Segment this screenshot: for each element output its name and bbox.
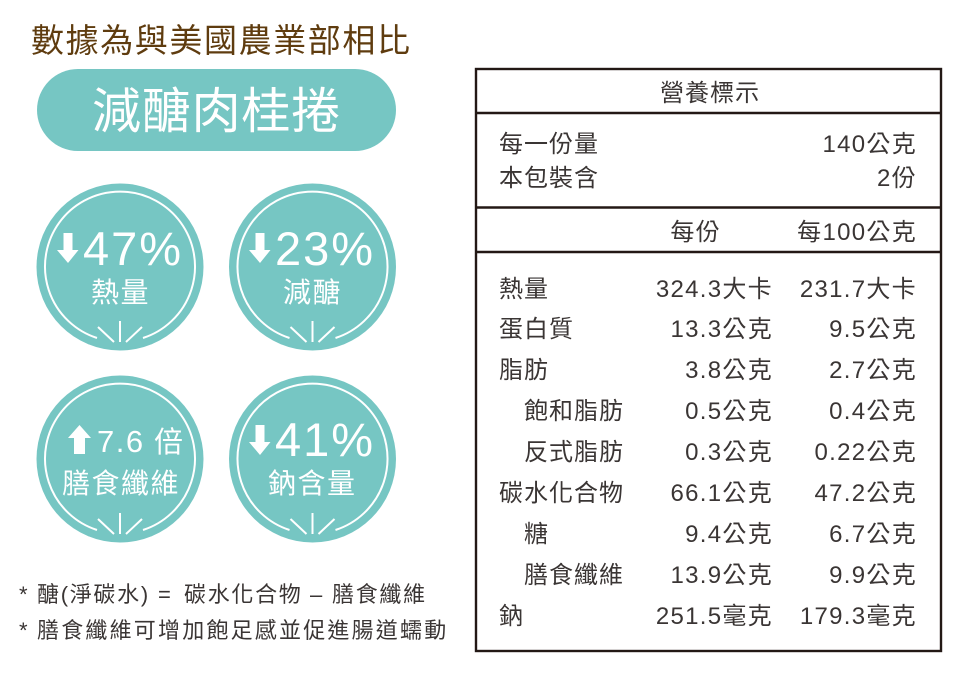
nutrient rows: 13.9公克	[670, 562, 773, 589]
serving info: 每一份量	[499, 131, 599, 158]
nutrient rows: 13.3公克	[670, 316, 773, 343]
nutrient rows: 蛋白質	[499, 316, 574, 343]
footnotes: =	[158, 582, 173, 607]
product name pill: 減醣肉桂捲	[92, 85, 341, 139]
nutrient rows: 9.4公克	[685, 521, 773, 548]
column headers: 每100公克	[797, 219, 917, 246]
serving info: 2份	[877, 165, 917, 192]
nutrient rows: 0.5公克	[685, 398, 773, 425]
footnotes: 膳食纖維	[332, 582, 427, 607]
badge: calories -47%: 47%	[83, 222, 183, 275]
product name pill	[37, 69, 396, 151]
nutrient rows: 324.3大卡	[656, 276, 773, 303]
footnotes: 膳食纖維可增加飽足感並促進腸道蠕動	[37, 618, 448, 643]
nutrient rows: 9.9公克	[829, 562, 917, 589]
nutrient rows: 179.3毫克	[800, 603, 917, 630]
badge: sodium -41%	[229, 376, 396, 542]
nutrient rows: 231.7大卡	[800, 276, 917, 303]
badge: dietary fiber 7.6x	[36, 376, 204, 542]
nutrient rows: 碳水化合物	[499, 480, 624, 507]
table title: 營養標示	[660, 80, 760, 107]
badge: calories -47%: 熱量	[91, 277, 150, 308]
footnotes: 醣(淨碳水)	[37, 582, 150, 607]
badge: calories -47%	[36, 184, 204, 350]
nutrient rows: 47.2公克	[814, 480, 917, 507]
nutrition facts table	[476, 69, 941, 651]
serving info: 140公克	[822, 131, 917, 158]
badge: dietary fiber 7.6x: 膳食纖維	[62, 468, 180, 499]
badge: dietary fiber 7.6x: 7.6	[97, 424, 145, 459]
nutrient rows: 飽和脂肪	[524, 398, 624, 425]
nutrient rows: 66.1公克	[670, 480, 773, 507]
footnotes: *	[19, 582, 29, 607]
badge: net carbs -23%	[229, 184, 396, 350]
serving info: 本包裝含	[499, 165, 599, 192]
badge: net carbs -23%: 23%	[275, 222, 375, 275]
serving info	[499, 131, 917, 192]
badge: net carbs -23%: 減醣	[283, 277, 342, 308]
nutrient rows: 251.5毫克	[656, 603, 773, 630]
nutrient rows: 反式脂肪	[524, 439, 624, 466]
nutrient rows: 0.4公克	[829, 398, 917, 425]
badge: sodium -41%: 鈉含量	[268, 468, 357, 499]
footnotes: *	[19, 618, 29, 643]
nutrient rows: 6.7公克	[829, 521, 917, 548]
nutrient rows: 鈉	[499, 603, 524, 630]
column headers	[670, 219, 917, 246]
badge: sodium -41%: 41%	[275, 413, 375, 466]
footnotes	[19, 582, 448, 643]
footnotes: 碳水化合物	[184, 582, 303, 607]
nutrient rows: 9.5公克	[829, 316, 917, 343]
nutrient rows: 0.3公克	[685, 439, 773, 466]
nutrient rows: 熱量	[499, 276, 549, 303]
badge: dietary fiber 7.6x: 倍	[154, 426, 185, 459]
nutrient rows: 0.22公克	[814, 439, 917, 466]
nutrient rows: 3.8公克	[685, 357, 773, 384]
nutrient rows: 膳食纖維	[524, 562, 624, 589]
nutrient rows: 脂肪	[499, 357, 549, 384]
nutrient rows	[499, 276, 917, 630]
nutrient rows: 2.7公克	[829, 357, 917, 384]
column headers: 每份	[670, 219, 721, 246]
nutrient rows: 糖	[524, 521, 549, 548]
footnotes: –	[310, 582, 324, 607]
title: 數據為與美國農業部相比	[31, 22, 412, 59]
